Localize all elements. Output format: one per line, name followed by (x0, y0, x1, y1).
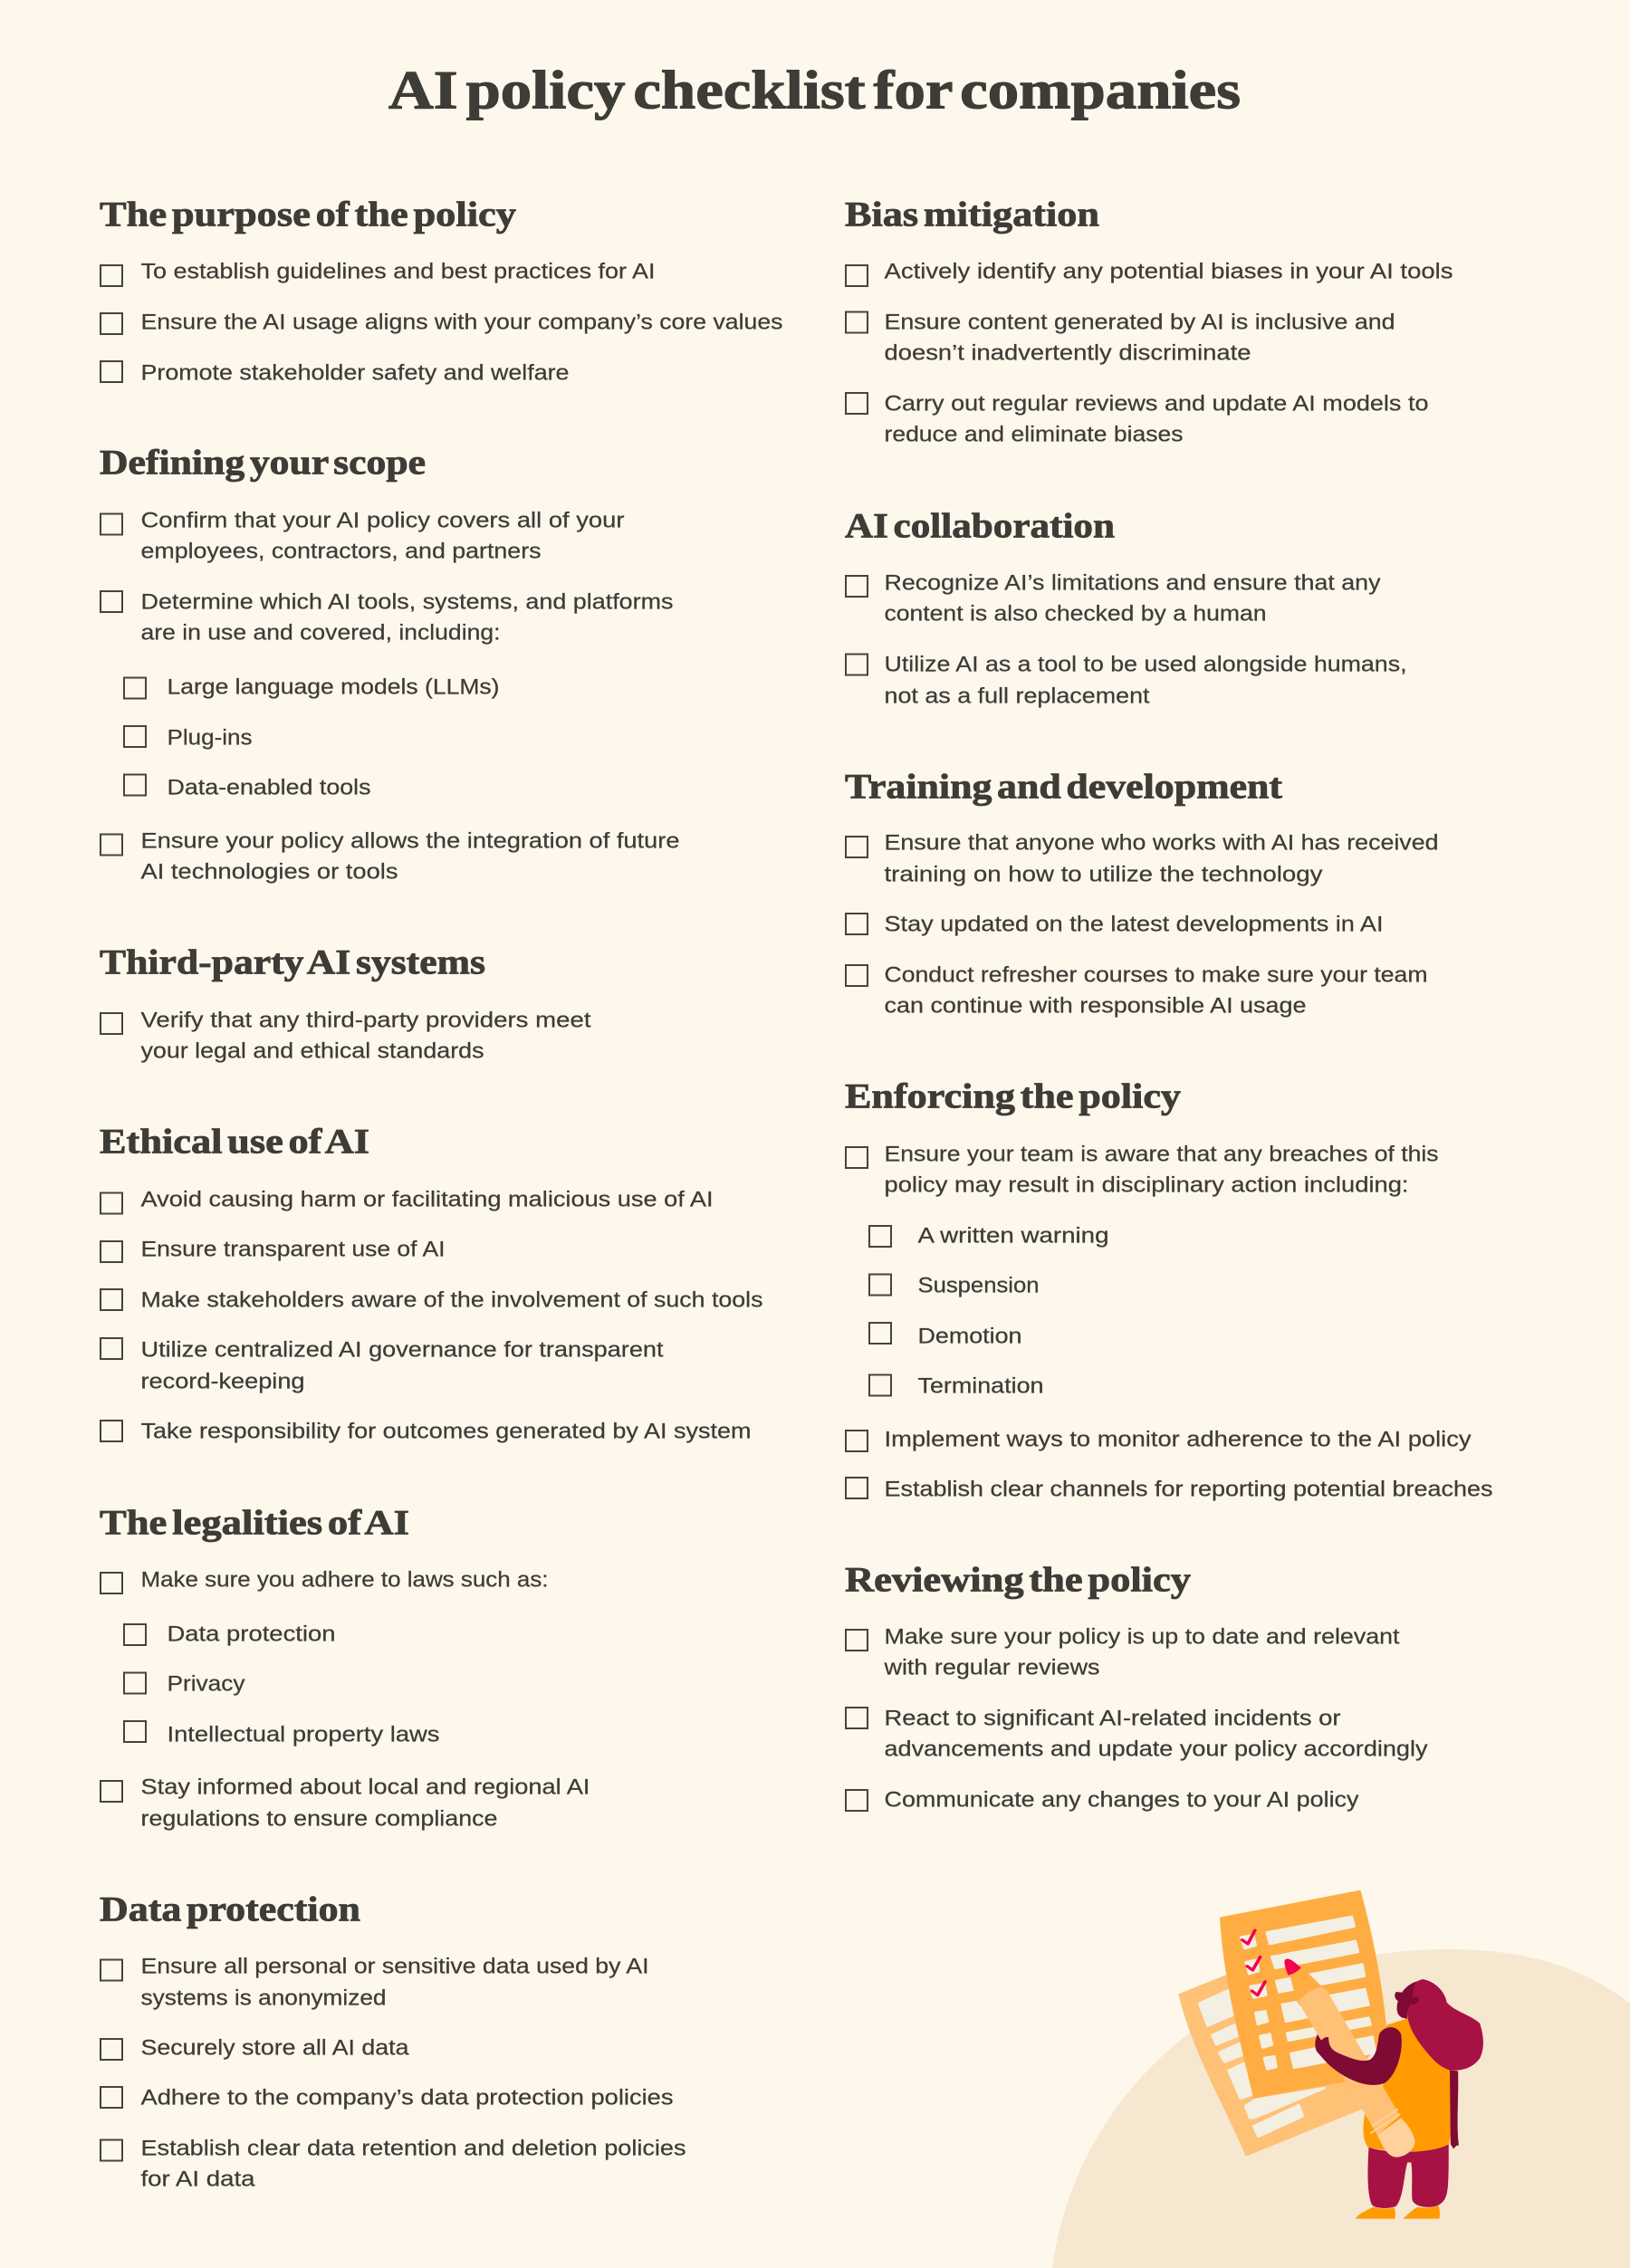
item: systems is anonymized (141, 1986, 386, 2011)
item: Establish clear data retention and deletion policies (141, 2137, 686, 2161)
item (101, 1775, 590, 1832)
sub-item (869, 1323, 1021, 1349)
pencil (1284, 1958, 1414, 2158)
item (846, 653, 1407, 709)
item: Ensure your policy allows the integration of future (141, 829, 679, 854)
item: Confirm that your AI policy covers all of your (141, 509, 625, 533)
item: Verify that any third-party providers meet (141, 1009, 591, 1033)
red check marks (1242, 1930, 1265, 1995)
item: To establish guidelines and best practices for AI (141, 260, 656, 284)
heading: The purpose of the policy (100, 196, 517, 234)
item: Stay updated on the latest developments in AI (884, 913, 1384, 937)
item: not as a full replacement (884, 684, 1150, 709)
item (101, 1955, 648, 2011)
item: Make sure your policy is up to date and relevant (884, 1625, 1400, 1650)
item: Securely store all AI data (141, 2036, 409, 2061)
item: Conduct refresher courses to make sure your team (884, 963, 1427, 988)
panel: data protection (100, 1890, 686, 2192)
heading: Data protection (100, 1890, 360, 1928)
trousers (1367, 2143, 1449, 2208)
sub-item: Data-enabled tools (167, 776, 371, 800)
item: Ensure that anyone who works with AI has received (884, 831, 1438, 856)
item (101, 509, 625, 564)
item: content is also checked by a human (884, 602, 1266, 627)
heading: Defining your scope (100, 444, 426, 482)
item (101, 829, 679, 885)
title: AI policy checklist for companies (388, 60, 1241, 120)
item: Actively identify any potential biases in your AI tools (884, 260, 1453, 284)
panel: training and development (845, 768, 1438, 1019)
item: regulations to ensure compliance (141, 1807, 498, 1832)
item: Ensure all personal or sensitive data used by AI (141, 1955, 648, 1979)
shoes (1356, 2206, 1440, 2219)
item: Avoid causing harm or facilitating malicious use of AI (141, 1188, 714, 1212)
item (846, 571, 1380, 627)
item: are in use and covered, including: (141, 621, 500, 646)
far arm (1450, 2071, 1459, 2148)
arm and hand (1315, 2027, 1402, 2085)
sweater (1363, 2018, 1453, 2151)
item (846, 392, 1429, 447)
hair (1407, 1979, 1483, 2071)
sub-item (869, 1274, 1040, 1298)
item: with regular reviews (883, 1656, 1099, 1680)
item: Utilize centralized AI governance for transparent (141, 1338, 664, 1363)
item: Establish clear channels for reporting potential breaches (884, 1478, 1492, 1502)
item: Ensure your team is aware that any breaches of this (884, 1143, 1438, 1167)
item: can continue with responsible AI usage (884, 994, 1306, 1019)
item: training on how to utilize the technology (884, 863, 1322, 887)
item: Ensure the AI usage aligns with your company’s core values (141, 311, 782, 335)
panel: AI collaboration (845, 507, 1407, 709)
sub-item: A written warning (918, 1224, 1108, 1249)
panel: bias mitigation (845, 196, 1453, 447)
sub-item (124, 726, 252, 751)
sub-item (124, 1672, 244, 1697)
heading: Reviewing the policy (845, 1561, 1192, 1599)
sub-item: Privacy (167, 1672, 244, 1697)
illustration: person ticking a checklist with a giant pencil (1178, 1890, 1483, 2219)
item: Adhere to the company’s data protection policies (141, 2086, 674, 2110)
item: employees, contractors, and partners (141, 540, 542, 564)
item (846, 1143, 1438, 1198)
item: Ensure content generated by AI is inclusive and (884, 311, 1395, 335)
item: Ensure transparent use of AI (141, 1238, 446, 1262)
face (1395, 1981, 1419, 2019)
item: Implement ways to monitor adherence to the AI policy (884, 1428, 1471, 1452)
sub-item: Termination (918, 1374, 1043, 1399)
item: React to significant AI-related incidents or (884, 1707, 1341, 1731)
item: Make sure you adhere to laws such as: (141, 1568, 549, 1593)
item: policy may result in disciplinary action including: (884, 1173, 1409, 1198)
panel: defining your scope (100, 444, 679, 885)
sub-item: Data protection (167, 1622, 335, 1647)
item: Determine which AI tools, systems, and platforms (141, 590, 674, 615)
sub-item (869, 1224, 1108, 1249)
item (846, 831, 1438, 887)
heading: AI collaboration (845, 507, 1115, 545)
item: Carry out regular reviews and update AI models to (884, 392, 1429, 416)
heading: Third-party AI systems (100, 943, 485, 981)
back paper (1178, 1971, 1365, 2157)
sub-item: Intellectual property laws (167, 1723, 440, 1747)
heading: Training and development (845, 768, 1282, 806)
item (101, 1338, 664, 1394)
sub-item (124, 1622, 335, 1647)
item: for AI data (141, 2168, 255, 2192)
panel: the purpose of the policy (100, 196, 782, 386)
panel: enforcing the policy (845, 1077, 1492, 1502)
item (101, 1009, 591, 1064)
item (846, 1707, 1427, 1762)
panel: third-party AI systems (100, 943, 591, 1064)
item: advancements and update your policy accordingly (884, 1737, 1427, 1762)
heading: Bias mitigation (845, 196, 1099, 234)
sub-item: Suspension (918, 1274, 1040, 1298)
panel: the legalities of AI (100, 1503, 590, 1832)
item (846, 1625, 1400, 1680)
heading: The legalities of AI (100, 1503, 409, 1543)
item: Communicate any changes to your AI policy (884, 1788, 1358, 1813)
panel: ethical use of AI (100, 1123, 762, 1444)
item: doesn’t inadvertently discriminate (884, 341, 1251, 366)
item: AI technologies or tools (141, 860, 398, 885)
item: Take responsibility for outcomes generated by AI system (141, 1420, 752, 1444)
sub-item: Demotion (918, 1325, 1021, 1349)
item: Recognize AI’s limitations and ensure that any (884, 571, 1380, 596)
panel: reviewing the policy (845, 1561, 1427, 1813)
sub-item: Large language models (LLMs) (167, 675, 500, 700)
item (846, 311, 1395, 366)
item: your legal and ethical standards (141, 1039, 484, 1064)
item (846, 963, 1427, 1019)
item (101, 590, 674, 646)
heading: Ethical use of AI (100, 1123, 369, 1161)
background arc (1052, 1949, 1630, 2268)
item: Make stakeholders aware of the involvement of such tools (141, 1288, 762, 1313)
item (101, 2137, 686, 2192)
sub-item (869, 1374, 1043, 1399)
item: Stay informed about local and regional AI (141, 1775, 590, 1800)
front paper (1220, 1890, 1387, 2099)
item: Promote stakeholder safety and welfare (141, 361, 569, 386)
item: reduce and eliminate biases (884, 423, 1183, 447)
heading: Enforcing the policy (845, 1077, 1182, 1115)
item: record-keeping (141, 1370, 304, 1394)
sub-item: Plug-ins (167, 726, 252, 751)
item: Utilize AI as a tool to be used alongside humans, (884, 653, 1407, 677)
